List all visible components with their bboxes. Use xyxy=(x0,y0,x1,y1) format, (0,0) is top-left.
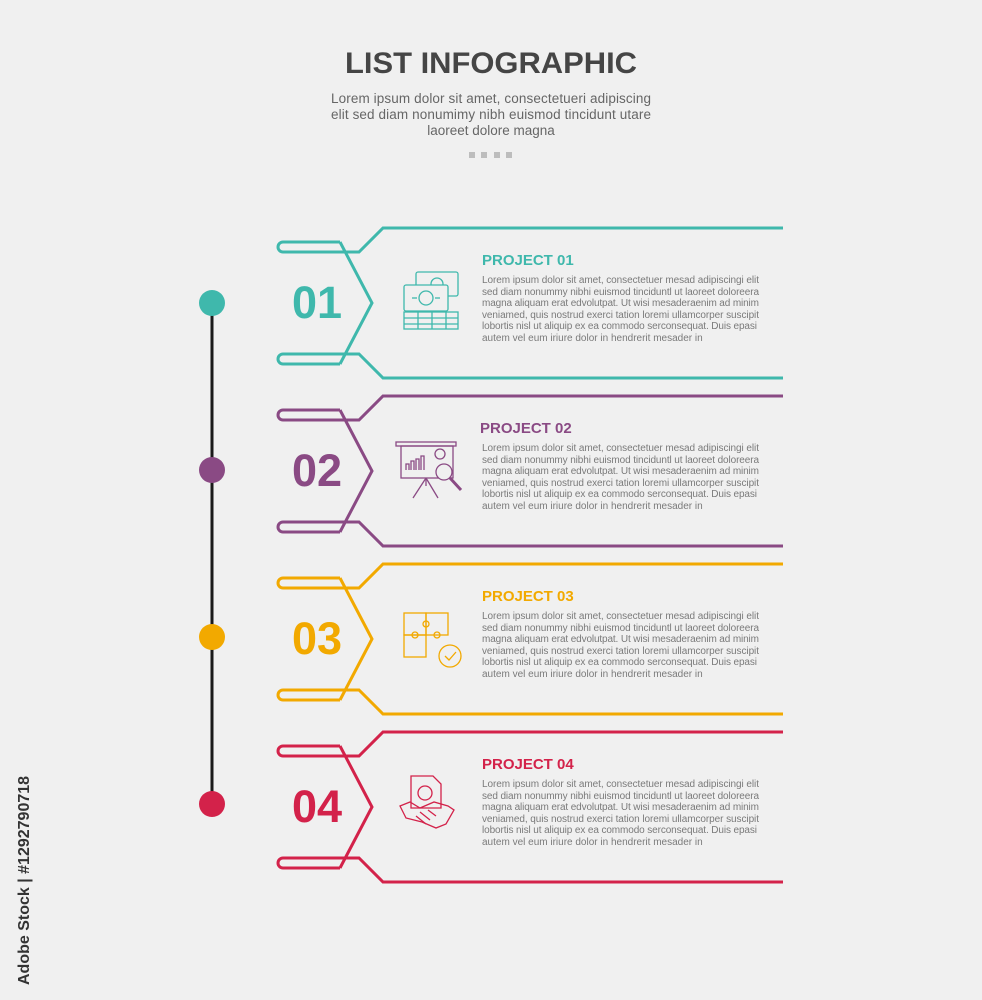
body text blocks xyxy=(482,275,759,848)
body text blocks: magna aliquam erat edvolutpat. Ut wisi mesaderaenim ad minim xyxy=(482,802,759,813)
dots decoration xyxy=(469,152,512,158)
body text blocks: autem vel eum iriure dolor in hendrerit mesader in xyxy=(482,669,703,680)
subtitle: elit sed diam nonumimy nibh euismod tincidunt utare xyxy=(331,107,651,122)
subtitle: laoreet dolore magna xyxy=(427,123,555,138)
body text blocks: lobortis nisl ut aliquip ex ea commodo serconsequat. Duis epasi xyxy=(482,657,757,668)
body text blocks: Lorem ipsum dolor sit amet, consectetuer mesad adipiscingi elit xyxy=(482,779,759,790)
watermark id: Adobe Stock | #1292790718 xyxy=(16,776,33,985)
panel: project 01: PROJECT 01 xyxy=(482,252,574,269)
panel: project 04: 04 xyxy=(292,781,342,832)
body text blocks: Lorem ipsum dolor sit amet, consectetuer mesad adipiscingi elit xyxy=(482,443,759,454)
panel: project 01 xyxy=(278,228,783,378)
panel: project 02: 02 xyxy=(292,445,342,496)
panel: project 04 xyxy=(278,732,783,882)
panel: project 04: PROJECT 04 xyxy=(482,756,574,773)
timeline xyxy=(199,290,225,817)
icon: puzzle xyxy=(404,613,461,667)
body text blocks: sed diam nonummy nibhi euismod tinciduntl ut laoreet doloreera xyxy=(482,455,759,466)
body text blocks: autem vel eum iriure dolor in hendrerit mesader in xyxy=(482,333,703,344)
body text blocks: veniamed, quis nostrud exerci tation loremi ullamcorper suscipit xyxy=(482,310,759,321)
icon: handshake document xyxy=(400,776,454,828)
body text blocks: autem vel eum iriure dolor in hendrerit mesader in xyxy=(482,501,703,512)
body text blocks: veniamed, quis nostrud exerci tation loremi ullamcorper suscipit xyxy=(482,814,759,825)
body text blocks: magna aliquam erat edvolutpat. Ut wisi mesaderaenim ad minim xyxy=(482,634,759,645)
body text blocks: veniamed, quis nostrud exerci tation loremi ullamcorper suscipit xyxy=(482,478,759,489)
panel: project 01: 01 xyxy=(292,277,342,328)
body text blocks: Lorem ipsum dolor sit amet, consectetuer mesad adipiscingi elit xyxy=(482,611,759,622)
panel: project 02 xyxy=(278,396,783,546)
body text blocks: lobortis nisl ut aliquip ex ea commodo serconsequat. Duis epasi xyxy=(482,489,757,500)
body text blocks: lobortis nisl ut aliquip ex ea commodo serconsequat. Duis epasi xyxy=(482,825,757,836)
body text blocks: Lorem ipsum dolor sit amet, consectetuer mesad adipiscingi elit xyxy=(482,275,759,286)
subtitle xyxy=(331,91,651,138)
panel: project 03: 03 xyxy=(292,613,342,664)
body text blocks: sed diam nonummy nibhi euismod tinciduntl ut laoreet doloreera xyxy=(482,791,759,802)
body text blocks: magna aliquam erat edvolutpat. Ut wisi mesaderaenim ad minim xyxy=(482,298,759,309)
body text blocks: autem vel eum iriure dolor in hendrerit mesader in xyxy=(482,837,703,848)
panel: project 03 xyxy=(278,564,783,714)
title: LIST INFOGRAPHIC xyxy=(345,47,637,80)
body text blocks: sed diam nonummy nibhi euismod tinciduntl ut laoreet doloreera xyxy=(482,623,759,634)
body text blocks: lobortis nisl ut aliquip ex ea commodo serconsequat. Duis epasi xyxy=(482,321,757,332)
panel: project 03: PROJECT 03 xyxy=(482,588,574,605)
icon: money xyxy=(404,272,458,329)
body text blocks: veniamed, quis nostrud exerci tation loremi ullamcorper suscipit xyxy=(482,646,759,657)
subtitle: Lorem ipsum dolor sit amet, consectetueri adipiscing xyxy=(331,91,651,106)
body text blocks: magna aliquam erat edvolutpat. Ut wisi mesaderaenim ad minim xyxy=(482,466,759,477)
panel: project 02: PROJECT 02 xyxy=(480,420,572,437)
icon: presentation xyxy=(396,442,461,498)
body text blocks: sed diam nonummy nibhi euismod tinciduntl ut laoreet doloreera xyxy=(482,287,759,298)
